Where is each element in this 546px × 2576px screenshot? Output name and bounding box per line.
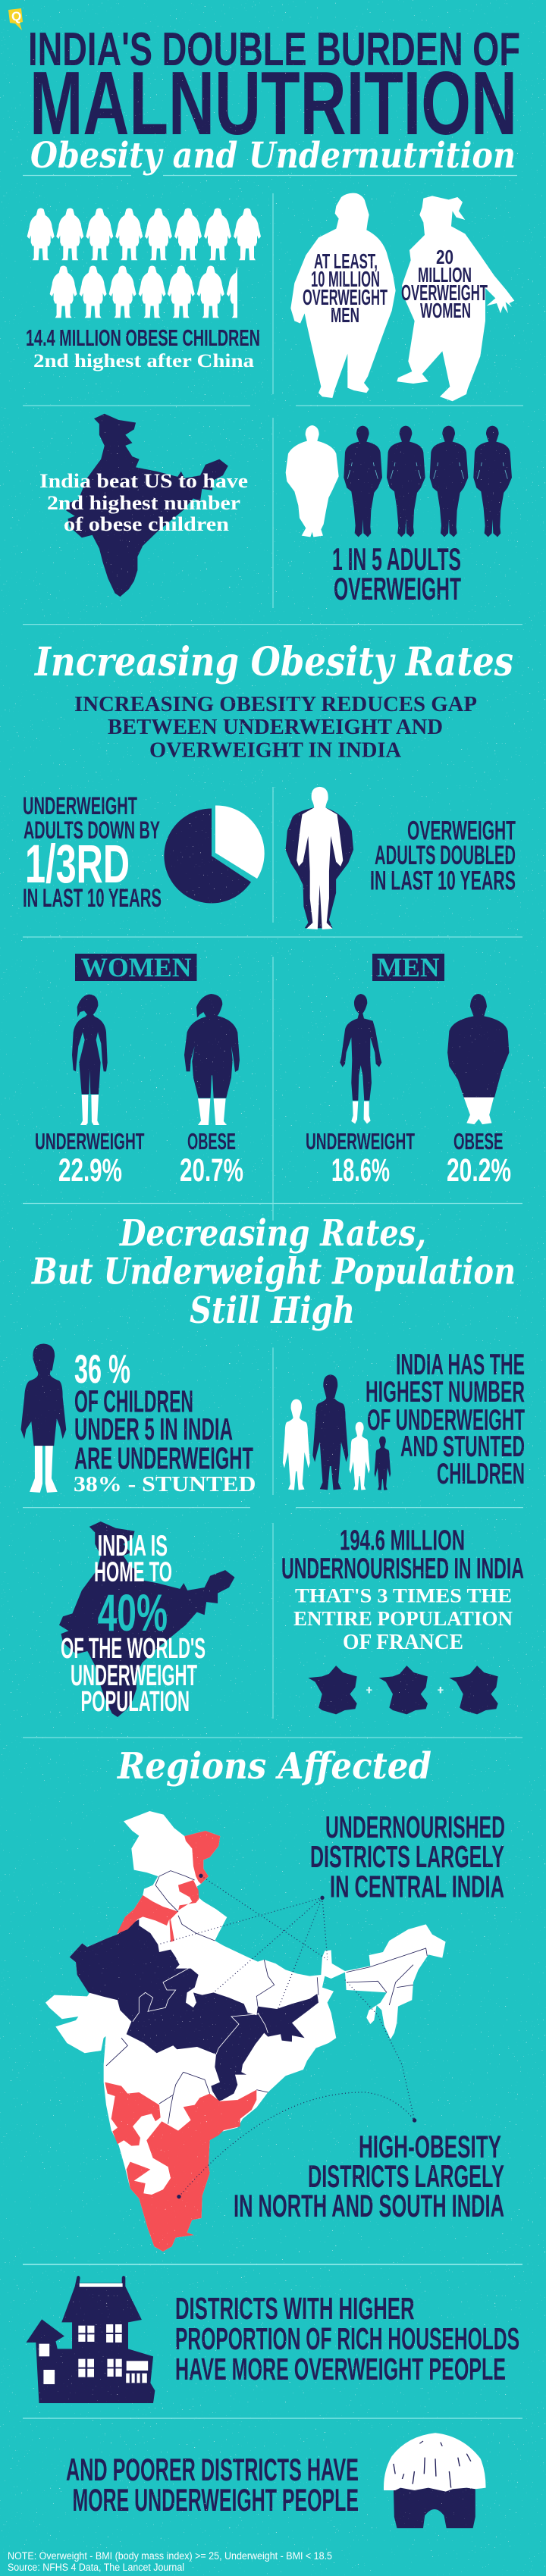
callout: high-obesity districts bbox=[234, 2129, 504, 2223]
pie chart bbox=[164, 805, 265, 903]
women text: 20 bbox=[436, 246, 453, 268]
panel: rich households bbox=[26, 2276, 519, 2403]
40 percent text: POPULATION bbox=[80, 1686, 190, 1718]
rich households text: DISTRICTS WITH HIGHER bbox=[175, 2291, 414, 2326]
icon: overweight woman bbox=[397, 196, 514, 401]
India beat US text: of obese children bbox=[64, 513, 230, 535]
poorer districts text bbox=[66, 2452, 359, 2518]
heading: decreasing rates: Still High bbox=[190, 1290, 355, 1332]
children text: OF CHILDREN bbox=[74, 1384, 193, 1419]
icon row: obese children bbox=[27, 208, 261, 318]
heading: decreasing rates: Decreasing Rates, bbox=[118, 1212, 426, 1255]
overweight text bbox=[370, 816, 516, 896]
obese children note: 2nd highest after China bbox=[33, 351, 255, 371]
stat: men obese: 20.2% bbox=[447, 1152, 511, 1189]
logo: The Quint bbox=[8, 8, 23, 30]
men text: 10 MILLION bbox=[311, 268, 380, 292]
stat: women obese: 20.7% bbox=[180, 1152, 243, 1189]
40 percent text: UNDERWEIGHT bbox=[71, 1659, 197, 1692]
France comparison text: ENTIRE POPULATION bbox=[293, 1607, 513, 1630]
panel: men bbox=[306, 952, 511, 1189]
panel: undernourished and France bbox=[281, 1525, 524, 1714]
one in five text bbox=[332, 541, 461, 606]
subheading: gap bbox=[74, 692, 477, 763]
label: men: MEN bbox=[377, 952, 440, 982]
high-obesity south districts bbox=[105, 2082, 256, 2252]
subheading: gap: OVERWEIGHT IN INDIA bbox=[149, 738, 401, 763]
icon: obese woman bbox=[184, 994, 240, 1125]
men text: OVERWEIGHT bbox=[303, 286, 388, 310]
icon: underweight man bbox=[340, 994, 381, 1123]
stat: men underweight: UNDERWEIGHT bbox=[306, 1129, 415, 1155]
France comparison text: OF FRANCE bbox=[343, 1631, 463, 1654]
40 percent text: 40% bbox=[98, 1584, 168, 1642]
subheading: gap: BETWEEN UNDERWEIGHT AND bbox=[108, 715, 443, 739]
women text bbox=[401, 246, 488, 322]
heading: regions affected: Regions Affected bbox=[116, 1745, 431, 1788]
icon: figure with overweight outline bbox=[286, 787, 353, 929]
underweight text bbox=[23, 792, 162, 913]
40 percent text bbox=[61, 1530, 206, 1718]
children text: 36 % bbox=[74, 1347, 130, 1392]
obese children figure: 14.4 MILLION OBESE CHILDREN bbox=[26, 325, 260, 351]
India beat US text: India beat US to have bbox=[39, 470, 248, 492]
stat: women underweight bbox=[35, 1129, 145, 1189]
panel: poorer districts bbox=[66, 2433, 486, 2528]
footnote: Source: NFHS 4 Data, The Lancet Journal bbox=[8, 2562, 184, 2573]
subheading: gap: INCREASING OBESITY REDUCES GAP bbox=[74, 692, 477, 716]
callout: undernourished districts bbox=[310, 1810, 505, 1904]
icon: hut bbox=[384, 2433, 486, 2528]
icon row: adults bbox=[286, 425, 512, 537]
logo: The Quint: Q bbox=[11, 9, 21, 24]
India beat US text bbox=[39, 470, 248, 535]
panel: overweight men and women bbox=[290, 193, 514, 401]
underweight text: UNDERWEIGHT bbox=[23, 792, 137, 819]
icon: underweight child bbox=[21, 1343, 66, 1493]
stat: men obese bbox=[447, 1129, 511, 1189]
poorer districts text: AND POORER DISTRICTS HAVE bbox=[66, 2452, 359, 2487]
underweight text: ADULTS DOWN BY bbox=[24, 816, 160, 844]
France comparison text: THAT'S 3 TIMES THE bbox=[295, 1584, 512, 1607]
men text: MEN bbox=[331, 303, 359, 327]
stat: women obese bbox=[180, 1129, 243, 1189]
stat: men underweight bbox=[306, 1129, 415, 1189]
icon: underweight woman bbox=[72, 995, 108, 1125]
high-obesity north districts bbox=[117, 1831, 220, 1942]
underweight text: 1/3RD bbox=[25, 835, 130, 895]
women text: MILLION bbox=[418, 263, 472, 287]
children text: UNDER 5 IN INDIA bbox=[74, 1412, 233, 1446]
one in five text: OVERWEIGHT bbox=[334, 571, 461, 606]
label: women: WOMEN bbox=[80, 952, 191, 982]
France comparison text bbox=[293, 1584, 513, 1654]
heading: decreasing rates bbox=[30, 1212, 516, 1332]
children text bbox=[74, 1347, 256, 1496]
40 percent text: OF THE WORLD'S bbox=[61, 1633, 206, 1665]
stat: women obese: OBESE bbox=[187, 1129, 236, 1155]
dotted connector lines bbox=[158, 1876, 415, 2197]
panel: obese children bbox=[26, 208, 261, 371]
panel: women bbox=[35, 952, 243, 1189]
icon: group of children bbox=[283, 1374, 391, 1490]
footnote: NOTE: Overweight - BMI (body mass index) >= 25, Underweight - BMI < 18.5 bbox=[8, 2550, 332, 2562]
panel: children underweight bbox=[21, 1343, 256, 1496]
children text: 38% - STUNTED bbox=[74, 1472, 256, 1496]
40 percent text: HOME TO bbox=[94, 1556, 172, 1587]
one in five text: 1 IN 5 ADULTS bbox=[332, 541, 461, 577]
icon: India map bbox=[66, 414, 228, 597]
icons: France maps bbox=[308, 1666, 498, 1714]
icon: overweight man bbox=[290, 193, 396, 398]
rich households text bbox=[175, 2291, 519, 2386]
undernourished text bbox=[281, 1525, 524, 1585]
men text bbox=[303, 249, 388, 327]
underweight text: IN LAST 10 YEARS bbox=[23, 884, 162, 913]
stat: women underweight: 22.9% bbox=[58, 1152, 122, 1189]
undernourished central districts bbox=[70, 1919, 318, 2101]
title bbox=[28, 23, 520, 177]
stat: women underweight: UNDERWEIGHT bbox=[35, 1129, 145, 1155]
children text: ARE UNDERWEIGHT bbox=[74, 1440, 253, 1475]
women text: WOMEN bbox=[420, 299, 471, 322]
40 percent text: INDIA IS bbox=[98, 1530, 168, 1562]
map base: India states bbox=[46, 1811, 446, 2252]
stat: men underweight: 18.6% bbox=[331, 1152, 390, 1189]
stat: men obese: OBESE bbox=[453, 1129, 504, 1155]
icon: large house bbox=[26, 2276, 155, 2403]
undernourished text: 194.6 MILLION bbox=[340, 1525, 465, 1557]
India beat US text: 2nd highest number bbox=[47, 492, 240, 514]
poorer districts text: MORE UNDERWEIGHT PEOPLE bbox=[73, 2482, 359, 2518]
connector dots bbox=[177, 1874, 416, 2198]
panel: highest number of underweight bbox=[283, 1349, 525, 1490]
icon: India map bbox=[59, 1521, 234, 1717]
panel: overweight adults doubled bbox=[286, 787, 516, 929]
highest number text bbox=[366, 1349, 525, 1490]
panel: one in five adults bbox=[286, 425, 512, 606]
icon: obese man bbox=[447, 994, 509, 1124]
panel: home to 40 percent bbox=[59, 1521, 234, 1718]
panel: underweight adults down bbox=[23, 792, 265, 913]
panel: India beat US bbox=[39, 414, 248, 597]
men text: AT LEAST, bbox=[314, 249, 378, 273]
map: regions of India bbox=[46, 1811, 446, 2252]
footnote bbox=[8, 2550, 332, 2573]
